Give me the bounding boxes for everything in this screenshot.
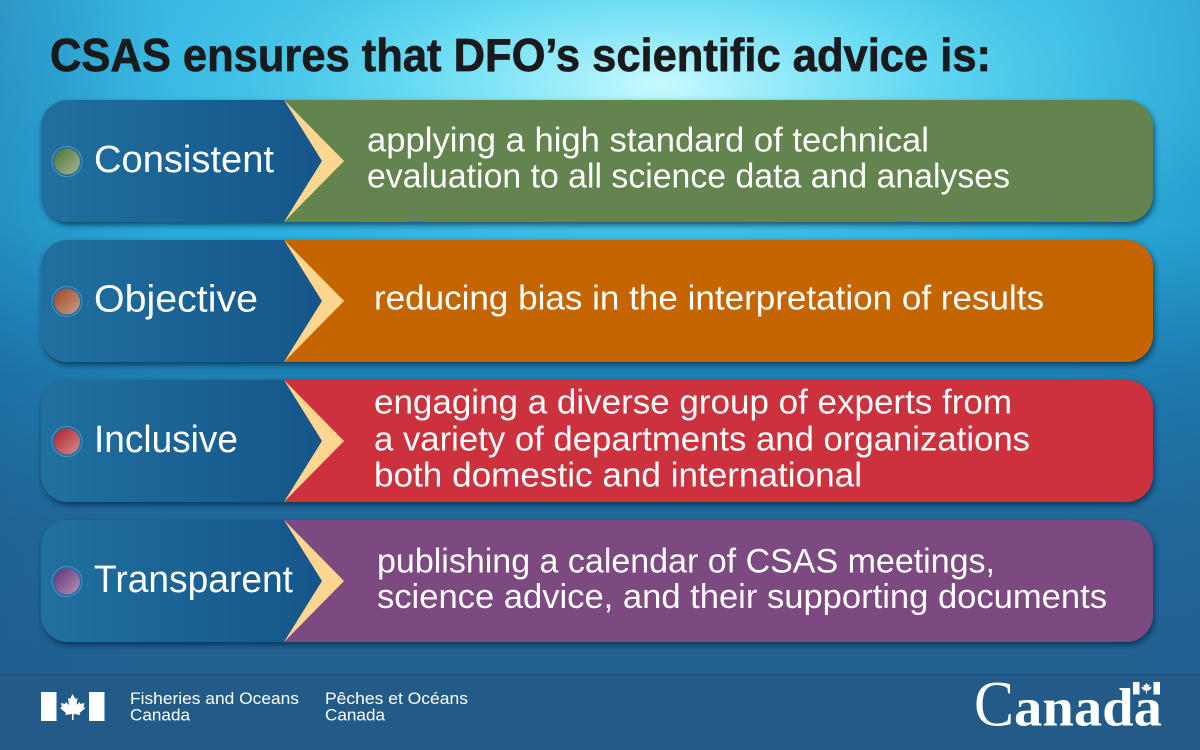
canada wordmark: [974, 668, 1162, 740]
icon: orange bullet: [52, 286, 82, 316]
description: transparent: science advice, and their supporting documents: [377, 578, 1107, 616]
icon: federal flag symbol: [41, 692, 104, 721]
label: transparent: Transparent: [94, 559, 293, 601]
label: objective: Objective: [94, 278, 258, 320]
panel: transparent: [41, 520, 1153, 642]
panel: consistent: [41, 100, 1153, 222]
department name english: Canada: [130, 706, 191, 724]
panel: inclusive: [41, 380, 1153, 502]
icon: wordmark flag: [1133, 682, 1160, 694]
canada wordmark: anada: [1014, 678, 1162, 738]
icon: green bullet: [52, 146, 82, 176]
department name french: Pêches et Océans: [325, 689, 468, 708]
label: consistent: Consistent: [94, 139, 274, 181]
footer band: [0, 674, 1200, 750]
canada wordmark: C: [974, 668, 1014, 740]
icon: red bullet: [52, 426, 82, 456]
icon: purple bullet: [52, 566, 82, 596]
description: transparent: publishing a calendar of CSAS meetings,: [377, 542, 995, 580]
panel: objective: [41, 240, 1153, 362]
description: objective: reducing bias in the interpretation of results: [374, 280, 1044, 318]
description: consistent: evaluation to all science data and analyses: [367, 158, 1010, 196]
label: inclusive: Inclusive: [94, 419, 238, 461]
description: inclusive: both domestic and international: [374, 456, 862, 494]
department name french: Canada: [325, 706, 386, 724]
title: CSAS ensures that DFO’s scientific advice is:: [50, 29, 991, 81]
description: inclusive: engaging a diverse group of experts from: [374, 384, 1012, 422]
description: consistent: applying a high standard of technical: [367, 122, 929, 160]
department name english: Fisheries and Oceans: [130, 689, 299, 708]
description: inclusive: a variety of departments and organizations: [374, 420, 1030, 458]
